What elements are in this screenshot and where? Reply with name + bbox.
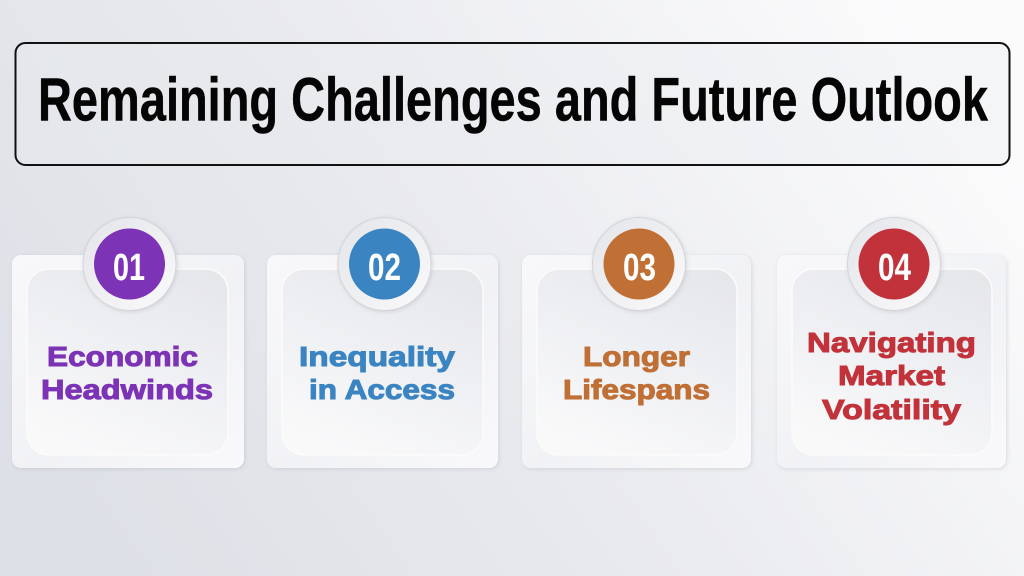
badge 03: 03 <box>623 247 656 289</box>
heading: Inequality in Access: Inequality <box>299 341 455 372</box>
heading: Longer Lifespans: Longer <box>583 341 690 372</box>
heading: Economic Headwinds <box>41 341 213 405</box>
badge 01: 01 <box>113 247 145 289</box>
badge 02: 02 <box>368 247 401 289</box>
badge 02 <box>338 218 431 310</box>
badge 04 <box>848 218 940 310</box>
badge 04: 04 <box>878 247 911 289</box>
badge 03 <box>592 218 686 310</box>
title box <box>16 43 1010 165</box>
badge 01 <box>83 218 176 310</box>
panel: 04 Navigating Market Volatility <box>777 218 1006 468</box>
panel: 03 Longer Lifespans <box>522 218 751 468</box>
panel: 02 Inequality in Access <box>267 218 498 468</box>
heading: Longer Lifespans: Lifespans <box>563 374 710 405</box>
heading: Navigating Market Volatility: Volatility <box>822 394 962 425</box>
heading: Navigating Market Volatility: Navigating <box>807 327 976 358</box>
heading: Longer Lifespans <box>563 341 710 405</box>
heading: Economic Headwinds: Headwinds <box>41 374 213 405</box>
panel: 01 Economic Headwinds <box>12 218 244 468</box>
heading: Economic Headwinds: Economic <box>47 341 198 372</box>
heading: Navigating Market Volatility: Market <box>838 360 945 391</box>
heading: Inequality in Access: in Access <box>309 374 455 405</box>
heading: Navigating Market Volatility <box>807 327 976 425</box>
heading: Inequality in Access <box>299 341 455 405</box>
